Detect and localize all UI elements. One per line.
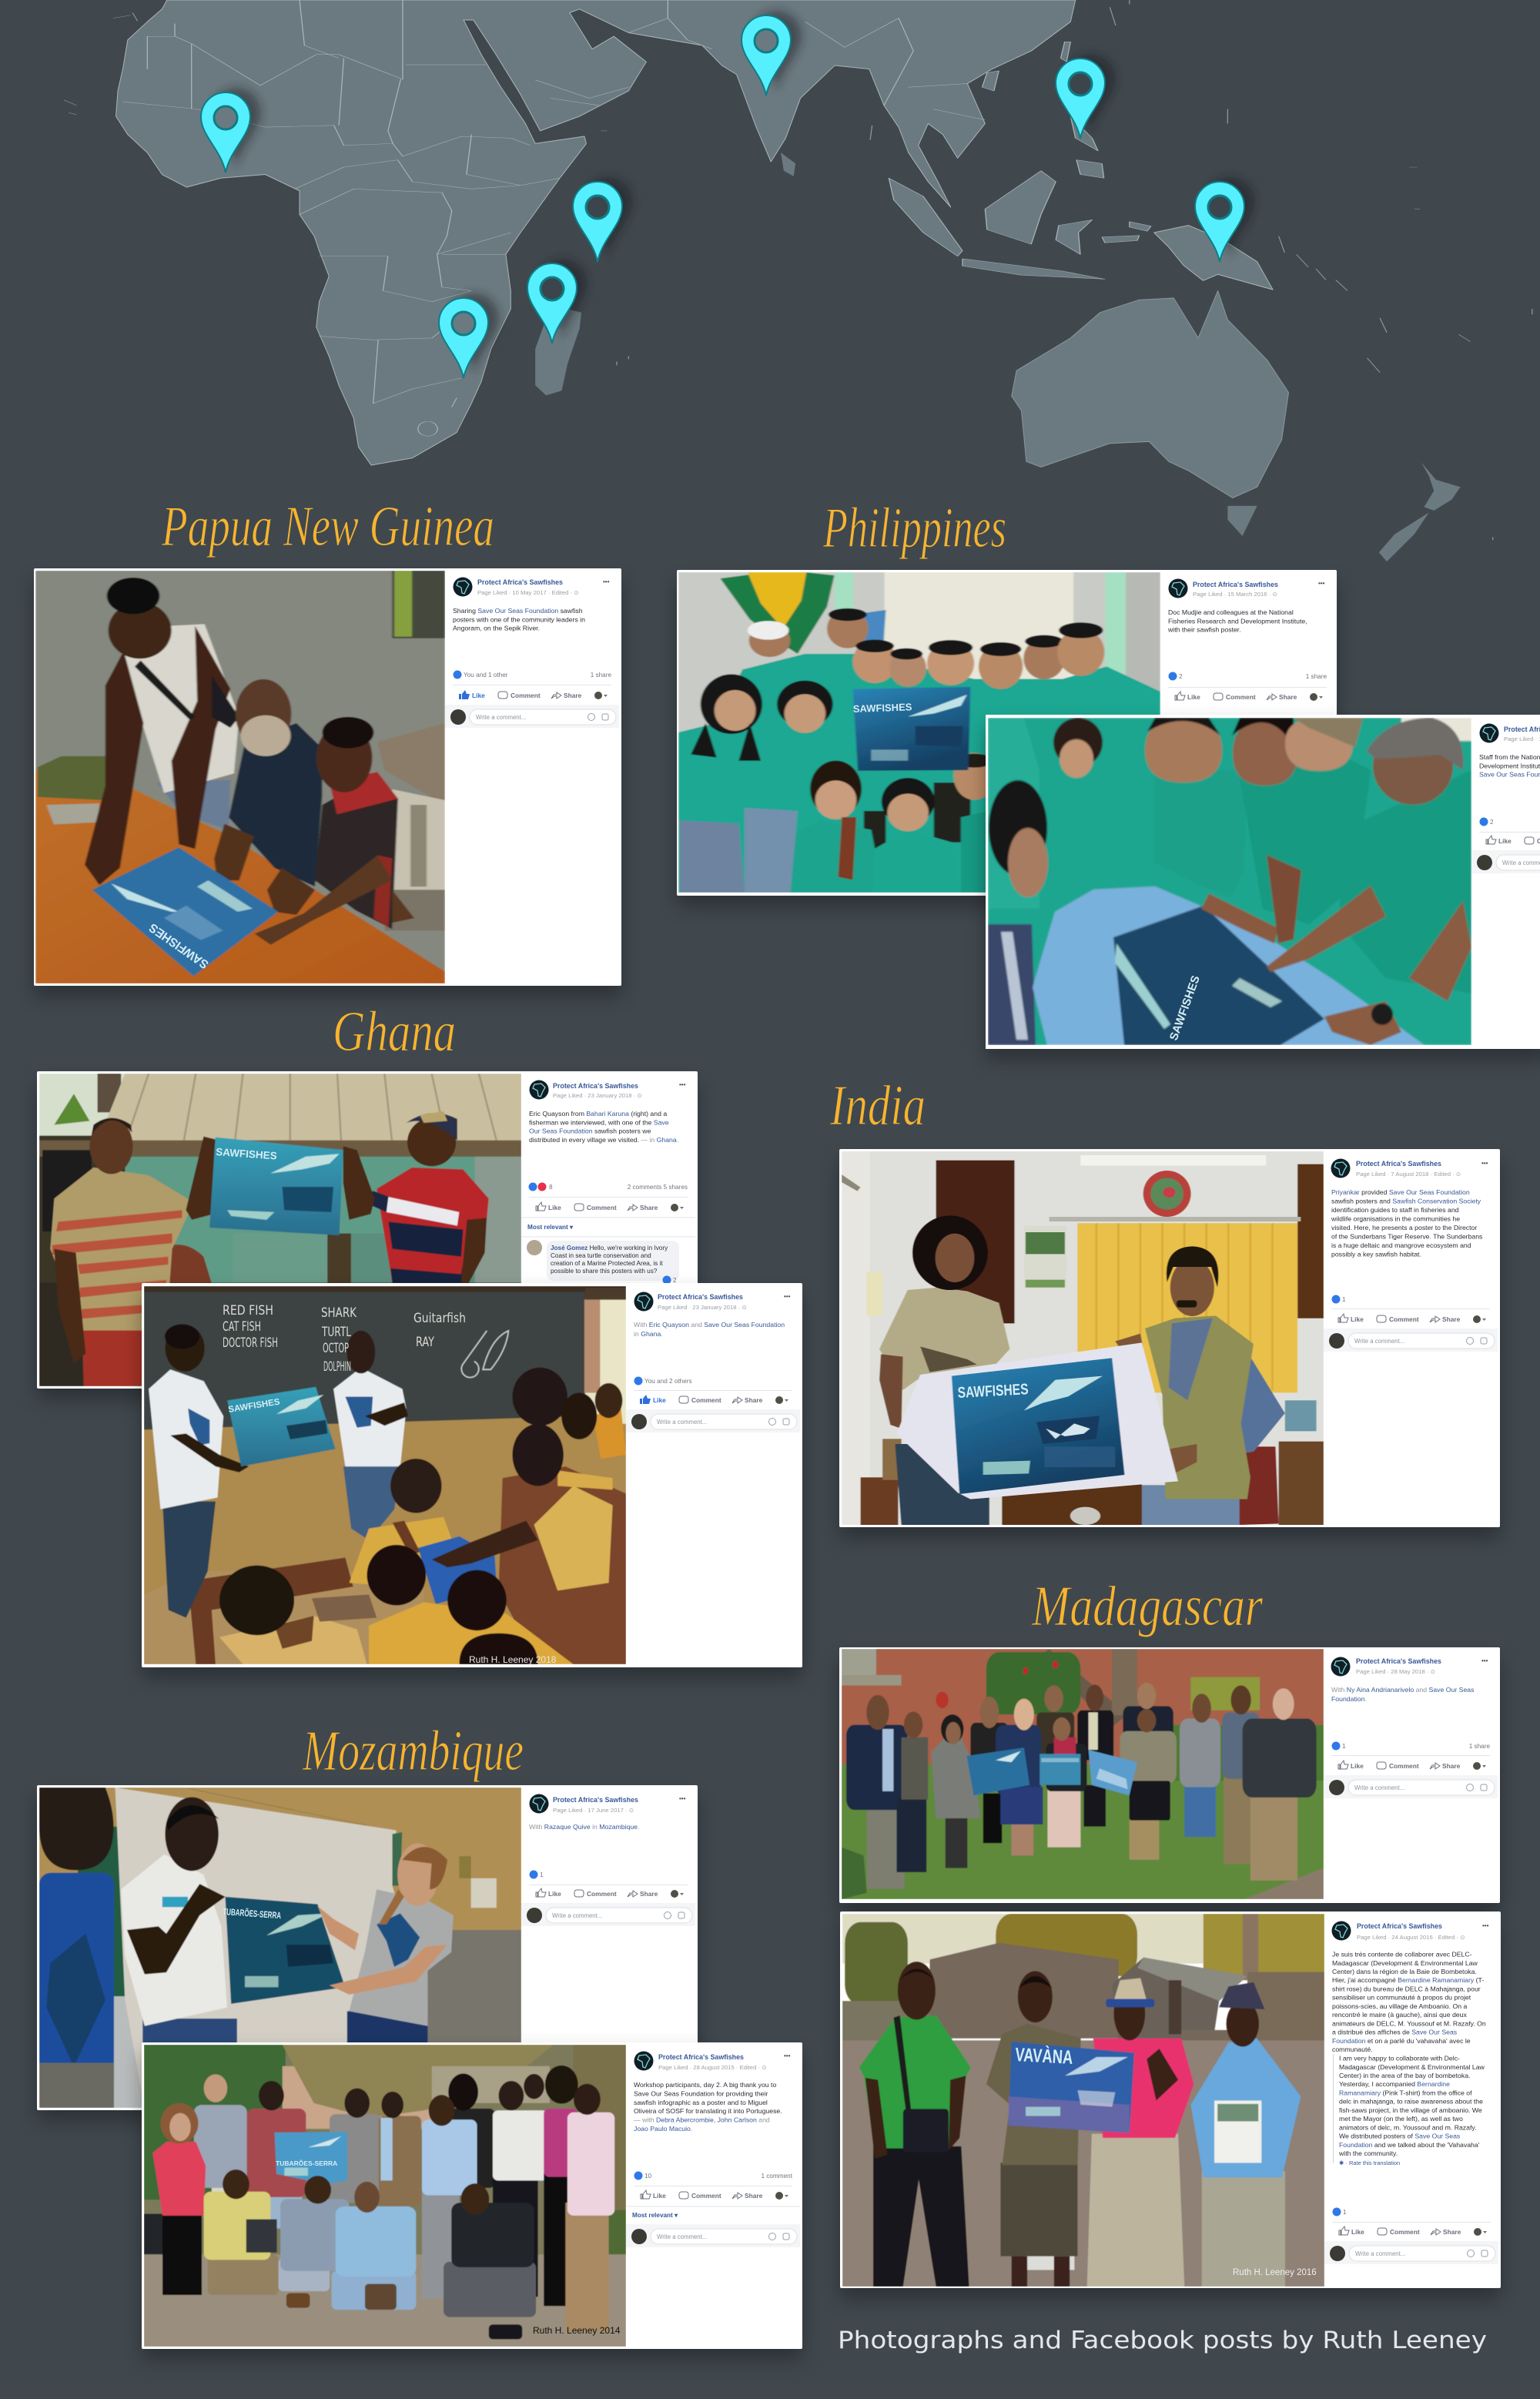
left presenter (162, 1501, 216, 1618)
table cloth (1033, 886, 1424, 1045)
Facebook post text: Protect Africa's Sawfishes (553, 1796, 638, 1804)
Facebook post text: Share (640, 1890, 658, 1898)
chalkboard words: RED FISH (223, 1303, 273, 1318)
Facebook post text: Like (1351, 1315, 1364, 1323)
heading: Madagascar: Madagascar (1031, 1575, 1264, 1638)
Facebook post text: Comment (1226, 693, 1256, 701)
map islands specks (64, 0, 1532, 540)
schoolchildren (499, 1466, 626, 1664)
Facebook post text: possibly a key sawfish habitat. (1331, 1251, 1421, 1258)
panel: Ghana post 1 (37, 1071, 698, 1389)
Facebook post text: Write a comment... (657, 1419, 707, 1426)
Facebook post text: ••• (1481, 1160, 1488, 1167)
panel: India post (839, 1149, 1500, 1527)
Facebook post text: Most relevant ▾ (527, 1224, 574, 1231)
Facebook post text: Page Liked · 28 May 2018 · ⊙ (1356, 1668, 1435, 1675)
Facebook post text: Comment (1389, 1762, 1419, 1770)
photo: classroom with chalkboard (144, 1286, 626, 1664)
Facebook post text: Ramanamiary (Pink T-shirt) from the office of (1339, 2089, 1472, 2096)
Facebook post text: Like (653, 1396, 666, 1404)
Facebook post text: Protect Africa's Sawfishes (1193, 581, 1278, 588)
Facebook post text: Page Liked · 24 August 2016 · Edited · ⊙ (1357, 1934, 1465, 1941)
Facebook post text: a distribué des affiches de Save Our Seas (1332, 2029, 1457, 2036)
Facebook post text: Angoram, on the Sepik River. (453, 625, 540, 632)
faces (749, 625, 790, 657)
chalkboard words (223, 1303, 466, 1375)
poster (275, 2132, 347, 2184)
Facebook post text: Oliveira of SOSF for translating it into Portuguese. (634, 2107, 782, 2115)
Facebook post text (445, 578, 619, 728)
pin: Papua New Guinea (1195, 177, 1255, 262)
Facebook post text: ••• (679, 1795, 686, 1802)
chalkboard words: Guitarfish (413, 1311, 466, 1326)
photo: two men holding poster by a hut (39, 1074, 521, 1386)
Facebook post text: Protect Africa's Sawfishes (553, 1082, 638, 1090)
map land: Sri Lanka (781, 152, 795, 176)
Facebook post text: Like (1187, 693, 1200, 701)
right man (377, 1168, 489, 1283)
poster title: SAWFISHES (957, 1381, 1029, 1402)
map land: Madagascar (535, 309, 581, 395)
Facebook post text: Share (745, 1396, 763, 1404)
crouching people (208, 2254, 279, 2295)
heading: Papua New Guinea: Papua New Guinea (161, 495, 494, 558)
Facebook post text: Save Our Seas Foundation for providing their (634, 2089, 768, 2097)
Facebook post text: 1 (1342, 1296, 1346, 1303)
Facebook post text: Foundation et on a parlé du 'vahavaha' avec le (1332, 2037, 1471, 2045)
Facebook post text: ••• (1482, 1922, 1489, 1929)
Facebook post text: animators of delc, m. Youssouf and m. Razafy. (1339, 2124, 1477, 2132)
Facebook post text: Page Liked · 7 August 2018 · Edited · ⊙ (1356, 1171, 1461, 1178)
Facebook post text: 1 (1343, 2209, 1347, 2216)
Facebook post text: met the Mayor (on the left), as well as two (1339, 2115, 1463, 2123)
Facebook post text: Comment (587, 1890, 617, 1898)
Facebook post text (521, 1794, 695, 1926)
panel: Philippines post 2 (986, 715, 1540, 1049)
Facebook post text: With Eric Quayson and Save Our Seas Foundation (634, 1321, 785, 1328)
Facebook post text: Foundation and we talked about the 'Vahavaha' (1339, 2141, 1479, 2149)
woman bent over, left (989, 780, 1047, 876)
Facebook post text: Madagascar (Development & Environmental Law (1332, 1959, 1478, 1967)
left man (39, 1873, 114, 2094)
Facebook post text: distributed in every village we visited. — in Ghana. (529, 1136, 678, 1144)
Facebook post text: Page Liked · 23 January 2018 · ⊙ (658, 1304, 747, 1311)
heading: Ghana: Ghana (333, 1000, 456, 1064)
Facebook post text: delc in mahajanga, to raise awareness about the (1339, 2098, 1483, 2106)
photo: two men with poster in office (842, 1151, 1324, 1525)
Facebook post text: sawfish posters and Sawfish Conservation Society (1331, 1197, 1481, 1205)
Facebook post text: Eric Quayson from Bahari Karuna (right) and a (529, 1110, 667, 1117)
chalkboard words: DOLPHIN (323, 1359, 351, 1375)
photo: group in teal shirts with poster (678, 572, 1160, 893)
poster title: SAWFISHES (1167, 974, 1203, 1042)
map land: New Guinea (1154, 226, 1273, 290)
Facebook post text: Write a comment... (552, 1912, 602, 1919)
man in green (873, 2146, 969, 2287)
Facebook post text: Most relevant ▾ (632, 2212, 678, 2219)
Facebook post text: ••• (603, 578, 610, 585)
Facebook post text: fish-saws project, in the village of amboanio. We (1339, 2106, 1482, 2114)
Facebook post text: Joao Paulo Macuio. (634, 2125, 692, 2133)
poster title: SAWFISHES (853, 701, 912, 715)
pin: Madagascar (527, 259, 588, 343)
Facebook post text: Je suis très contente de collaborer avec DELC- (1332, 1950, 1472, 1958)
Facebook post text: identification guides to staff in fisheries and (1331, 1206, 1459, 1214)
Facebook post text: sensibiliser un communauté à propos du projet (1332, 1994, 1471, 2002)
poster (227, 1387, 336, 1466)
Facebook post text: Write a comment... (1354, 1784, 1404, 1791)
poster title on table: SAWFISHES (147, 920, 211, 971)
woman in pink (1087, 2134, 1184, 2287)
Facebook post text: I am very happy to collaborate with Delc- (1339, 2055, 1460, 2062)
Facebook post text: 8 (549, 1184, 553, 1191)
Facebook post text: With Ny Aina Andrianarivelo and Save Our Seas (1331, 1686, 1474, 1694)
map pins (201, 11, 1255, 378)
Facebook post text: Write a comment... (476, 714, 526, 721)
Facebook post text (1324, 1158, 1498, 1352)
people (867, 1801, 905, 1889)
Facebook post text: posters with one of the community leaders in (453, 615, 585, 623)
right presenter (343, 1466, 400, 1540)
poster title: SAWFISHES (216, 1146, 277, 1162)
Facebook post text: ••• (784, 2052, 791, 2059)
Facebook post text (521, 1080, 695, 1285)
Facebook post text: You and 2 others (644, 1378, 692, 1385)
Facebook post text: Page Liked · 15 March 2016 · ⊙ (1193, 591, 1277, 598)
Facebook post text: ••• (1481, 1657, 1488, 1664)
Facebook post text: Comment (1389, 1315, 1419, 1323)
Facebook post text: Like (653, 2192, 666, 2200)
Facebook post text: Write a comment... (657, 2233, 707, 2240)
pin: Ghana (201, 88, 261, 173)
Facebook post text: Center) dans la région de la Baie de Bombetoka. (1332, 1968, 1477, 1975)
Facebook post text (1471, 724, 1540, 873)
chalkboard words: SHARK (321, 1305, 357, 1321)
Facebook post text: You and 1 other (464, 672, 508, 678)
Facebook post text: 2 (673, 1277, 677, 1284)
Facebook post text: Fisheries Research and Development Institute, (1168, 617, 1307, 625)
photo credit: Ruth H. Leeney 2016 (1233, 2268, 1317, 2277)
Facebook post text: 1 (1342, 1743, 1346, 1750)
Facebook post text: rencontré le maire (à gauche), ainsi que deux (1332, 2011, 1467, 2019)
heading: Philippines: Philippines (822, 497, 1006, 560)
Facebook post text: Share (640, 1204, 658, 1211)
photo: workshop group with poster (144, 2045, 626, 2347)
Facebook post text: Share (1279, 693, 1297, 701)
Facebook post text (626, 2052, 800, 2247)
Facebook post text (1324, 1921, 1498, 2264)
man in camouflage (1000, 2163, 1077, 2257)
poster title: TUBARÕES-SERRA (276, 2159, 337, 2167)
Facebook post text: 10 (644, 2173, 652, 2180)
credit line: Photographs and Facebook posts by Ruth Leeney (838, 2327, 1487, 2354)
Facebook post text: Page Liked · 10 May 2017 · Edited · ⊙ (477, 589, 579, 596)
Facebook post text: Like (472, 692, 485, 699)
right man (1142, 1485, 1240, 1525)
old man (229, 723, 322, 886)
Facebook post text: ✱ · Rate this translation (1339, 2159, 1400, 2166)
Facebook post text: 1 (540, 1871, 544, 1878)
map land: Tasmania (1227, 506, 1257, 536)
Facebook post text: Coast in sea turtle conservation and (551, 1252, 651, 1259)
Facebook post text: Center) in the area of the bay of bombetoka. (1339, 2072, 1470, 2079)
pin: Mozambique (439, 293, 499, 378)
Facebook post text: possible to share this posters with us? (551, 1268, 658, 1275)
Facebook post text: in Ghana. (634, 1330, 663, 1338)
chalkboard words: CAT FISH (223, 1319, 261, 1335)
Facebook post text: ••• (784, 1293, 791, 1300)
panel: Madagascar post 1 (839, 1647, 1500, 1903)
Facebook post text: with their sawfish poster. (1167, 626, 1241, 634)
pin: Philippines (1056, 54, 1116, 139)
Facebook post text: wildlife organisations in the communities he (1331, 1215, 1460, 1223)
Facebook post text: Protect Africa's Sawfishes (1356, 1160, 1441, 1168)
Facebook post text: Madagascar (Development & Environmental Law (1339, 2063, 1485, 2071)
Facebook post text: Share (745, 2192, 763, 2200)
photo: men with poster on a wooden table (35, 571, 445, 983)
Facebook post text: of the Sunderbans Tiger Reserve. The Sunderbans (1331, 1232, 1483, 1240)
Facebook post text: sawfish infographic as a poster and to Miguel (634, 2099, 768, 2106)
panel: Madagascar post 2 (840, 1911, 1501, 2288)
Facebook post text: ••• (679, 1081, 686, 1088)
Facebook post text: Share (1442, 1762, 1461, 1770)
posters (967, 1747, 1029, 1795)
poster title: TUBARÕES-SERRA (223, 1905, 282, 1921)
poster (226, 1897, 345, 2004)
photo: four people in a village (842, 1914, 1324, 2287)
panel: Mozambique post 1 (37, 1785, 698, 2110)
poster (853, 687, 970, 771)
heading: Mozambique: Mozambique (302, 1720, 524, 1783)
map land: Indonesia and Philippines islands (889, 42, 1151, 279)
Facebook post text: Comment (511, 692, 541, 699)
poster on the table (92, 847, 278, 977)
Facebook post text: animateurs de DELC, M. Youssouf et M. Razafy. On (1332, 2019, 1486, 2027)
chalkboard words: OCTOP (323, 1341, 349, 1356)
Facebook post text: ••• (1318, 580, 1325, 587)
poster paper (896, 1342, 1178, 1499)
Facebook post text: Like (1351, 2228, 1364, 2236)
Facebook post text: Foundation. (1331, 1695, 1367, 1703)
Facebook post text: Protect Africa's Sawfishes (477, 578, 563, 586)
poster title: SAWFISHES (228, 1397, 281, 1415)
chalkboard words: DOCTOR FISH (223, 1335, 278, 1351)
map borders (122, 0, 985, 436)
Facebook post text: Protect Africa's Sawfishes (658, 2053, 744, 2061)
Facebook post text: with the community. (1338, 2149, 1398, 2157)
chalkboard words: RAY (416, 1335, 434, 1350)
Facebook post text: Like (548, 1890, 561, 1898)
photo: man and woman with Portuguese poster (39, 1788, 521, 2108)
panel: Ghana post 2 (142, 1283, 802, 1667)
Facebook post text: Yesterday, I accompanied Bernardine (1339, 2080, 1450, 2088)
left man (82, 1322, 164, 1386)
Facebook post text: creation of a Marine Protected Area, is it (551, 1260, 663, 1267)
Facebook post text: Like (1498, 837, 1512, 845)
Facebook post text: — with Debra Abercrombie, John Carlson and (634, 2116, 770, 2124)
Facebook post text: Page Liked · 28 August 2015 · Edited · ⊙ (658, 2064, 767, 2071)
Facebook post text: 1 comment (761, 2173, 793, 2180)
map land: Australia (1012, 291, 1288, 498)
Facebook post text: José Gomez Hello, we're working in Ivory (551, 1245, 668, 1251)
Facebook post text: 1 share (1469, 1743, 1490, 1750)
Facebook post text: Protect Africa's Sawfishes (1357, 1922, 1442, 1930)
poster (209, 1138, 343, 1235)
Facebook post text: Protect Africa's Sawfishes (658, 1293, 743, 1301)
Facebook post text: Share (564, 692, 582, 699)
Facebook post text: 2 (1490, 819, 1494, 826)
map land: Africa and Asia (116, 0, 1076, 465)
photo: group with posters on a lawn (842, 1649, 1324, 1899)
Facebook post text: Workshop participants, day 2. A big thank you to (634, 2081, 776, 2089)
Facebook post text: 1 share (1306, 673, 1327, 680)
world map (64, 0, 1532, 561)
photo credit: Ruth H. Leeney 2014 (533, 2325, 621, 2336)
Facebook post text: Comment (691, 2192, 721, 2200)
Facebook post text: Like (548, 1204, 561, 1211)
standing men (1155, 770, 1247, 897)
panel: Philippines post 1 (677, 570, 1337, 896)
chalk drawings (461, 1331, 508, 1378)
back row people (212, 2184, 239, 2284)
Facebook post text: Hier, j'ai accompagné Bernardine Ramanamiary (T- (1332, 1976, 1484, 1984)
Facebook post text: is a huge deltaic and mangrove ecosystem and (1331, 1241, 1471, 1249)
pin: East Africa (573, 177, 633, 262)
man standing (157, 779, 230, 830)
Facebook post text (1167, 579, 1327, 701)
photo: staff reading poster on table (988, 718, 1471, 1045)
Facebook post text: Sharing Save Our Seas Foundation sawfish (453, 607, 583, 615)
Facebook post text: Priyankar provided Save Our Seas Foundation (1331, 1188, 1470, 1196)
Facebook post text: Comment (691, 1396, 721, 1404)
Facebook post text: Share (1442, 1315, 1461, 1323)
woman (347, 2011, 427, 2108)
Facebook post text: 2 (1179, 673, 1183, 680)
Facebook post text: 2 comments 5 shares (628, 1184, 688, 1191)
Facebook post text: Our Seas Foundation sawfish posters we (529, 1127, 651, 1135)
Facebook post text: 1 share (591, 672, 611, 678)
man in blue with certificate (1202, 2171, 1285, 2287)
Facebook post text: Share (1443, 2228, 1461, 2236)
Facebook post text: fisherman we interviewed, with one of the Save (529, 1118, 669, 1126)
Facebook post text (626, 1292, 800, 1432)
Facebook post text: Comment (587, 1204, 617, 1211)
Facebook post text: We distributed posters of Save Our Seas (1339, 2133, 1460, 2140)
boy (315, 773, 398, 929)
Facebook post text: shirt rose) du bureau de DELC à Mahajanga, pour (1332, 1985, 1481, 1993)
map land: New Zealand (1379, 462, 1461, 561)
Facebook post text: Page Liked · 23 January 2018 · ⊙ (553, 1092, 642, 1099)
Facebook post text: visited. Here, he presents a poster to the Director (1331, 1224, 1477, 1231)
Facebook post text: communauté. (1332, 2046, 1373, 2053)
Facebook post text: poissons-scies, au village de Amboanio. On a (1332, 2002, 1467, 2010)
Facebook post text: Write a comment... (1354, 1338, 1404, 1345)
centre man (142, 2019, 237, 2108)
Facebook post text: Write a comment... (1355, 2250, 1405, 2257)
heading: India: India (829, 1074, 926, 1138)
panel: Papua New Guinea post (34, 568, 621, 986)
Facebook post text: Like (1351, 1762, 1364, 1770)
Facebook post text (1324, 1657, 1498, 1798)
photo credit: Ruth H. Leeney 2018 (469, 1654, 557, 1665)
poster (1009, 2042, 1134, 2133)
pin: India (742, 11, 802, 95)
shirts (678, 654, 1160, 893)
left man (895, 1444, 989, 1525)
Facebook post text: With Razaque Quive in Mozambique. (529, 1823, 639, 1831)
chalkboard words: TURTL (321, 1325, 351, 1340)
Facebook post text: Page Liked · 17 June 2017 · ⊙ (553, 1807, 634, 1814)
poster title: VAVÀNA (1015, 2043, 1073, 2069)
poster (1113, 906, 1324, 1045)
panel: Mozambique post 2 (142, 2042, 802, 2349)
Facebook post text: Comment (1390, 2228, 1420, 2236)
Facebook post text: Protect Africa's Sawfishes (1356, 1657, 1441, 1665)
Facebook post text: Doc Mudjie and colleagues at the National (1168, 608, 1294, 616)
